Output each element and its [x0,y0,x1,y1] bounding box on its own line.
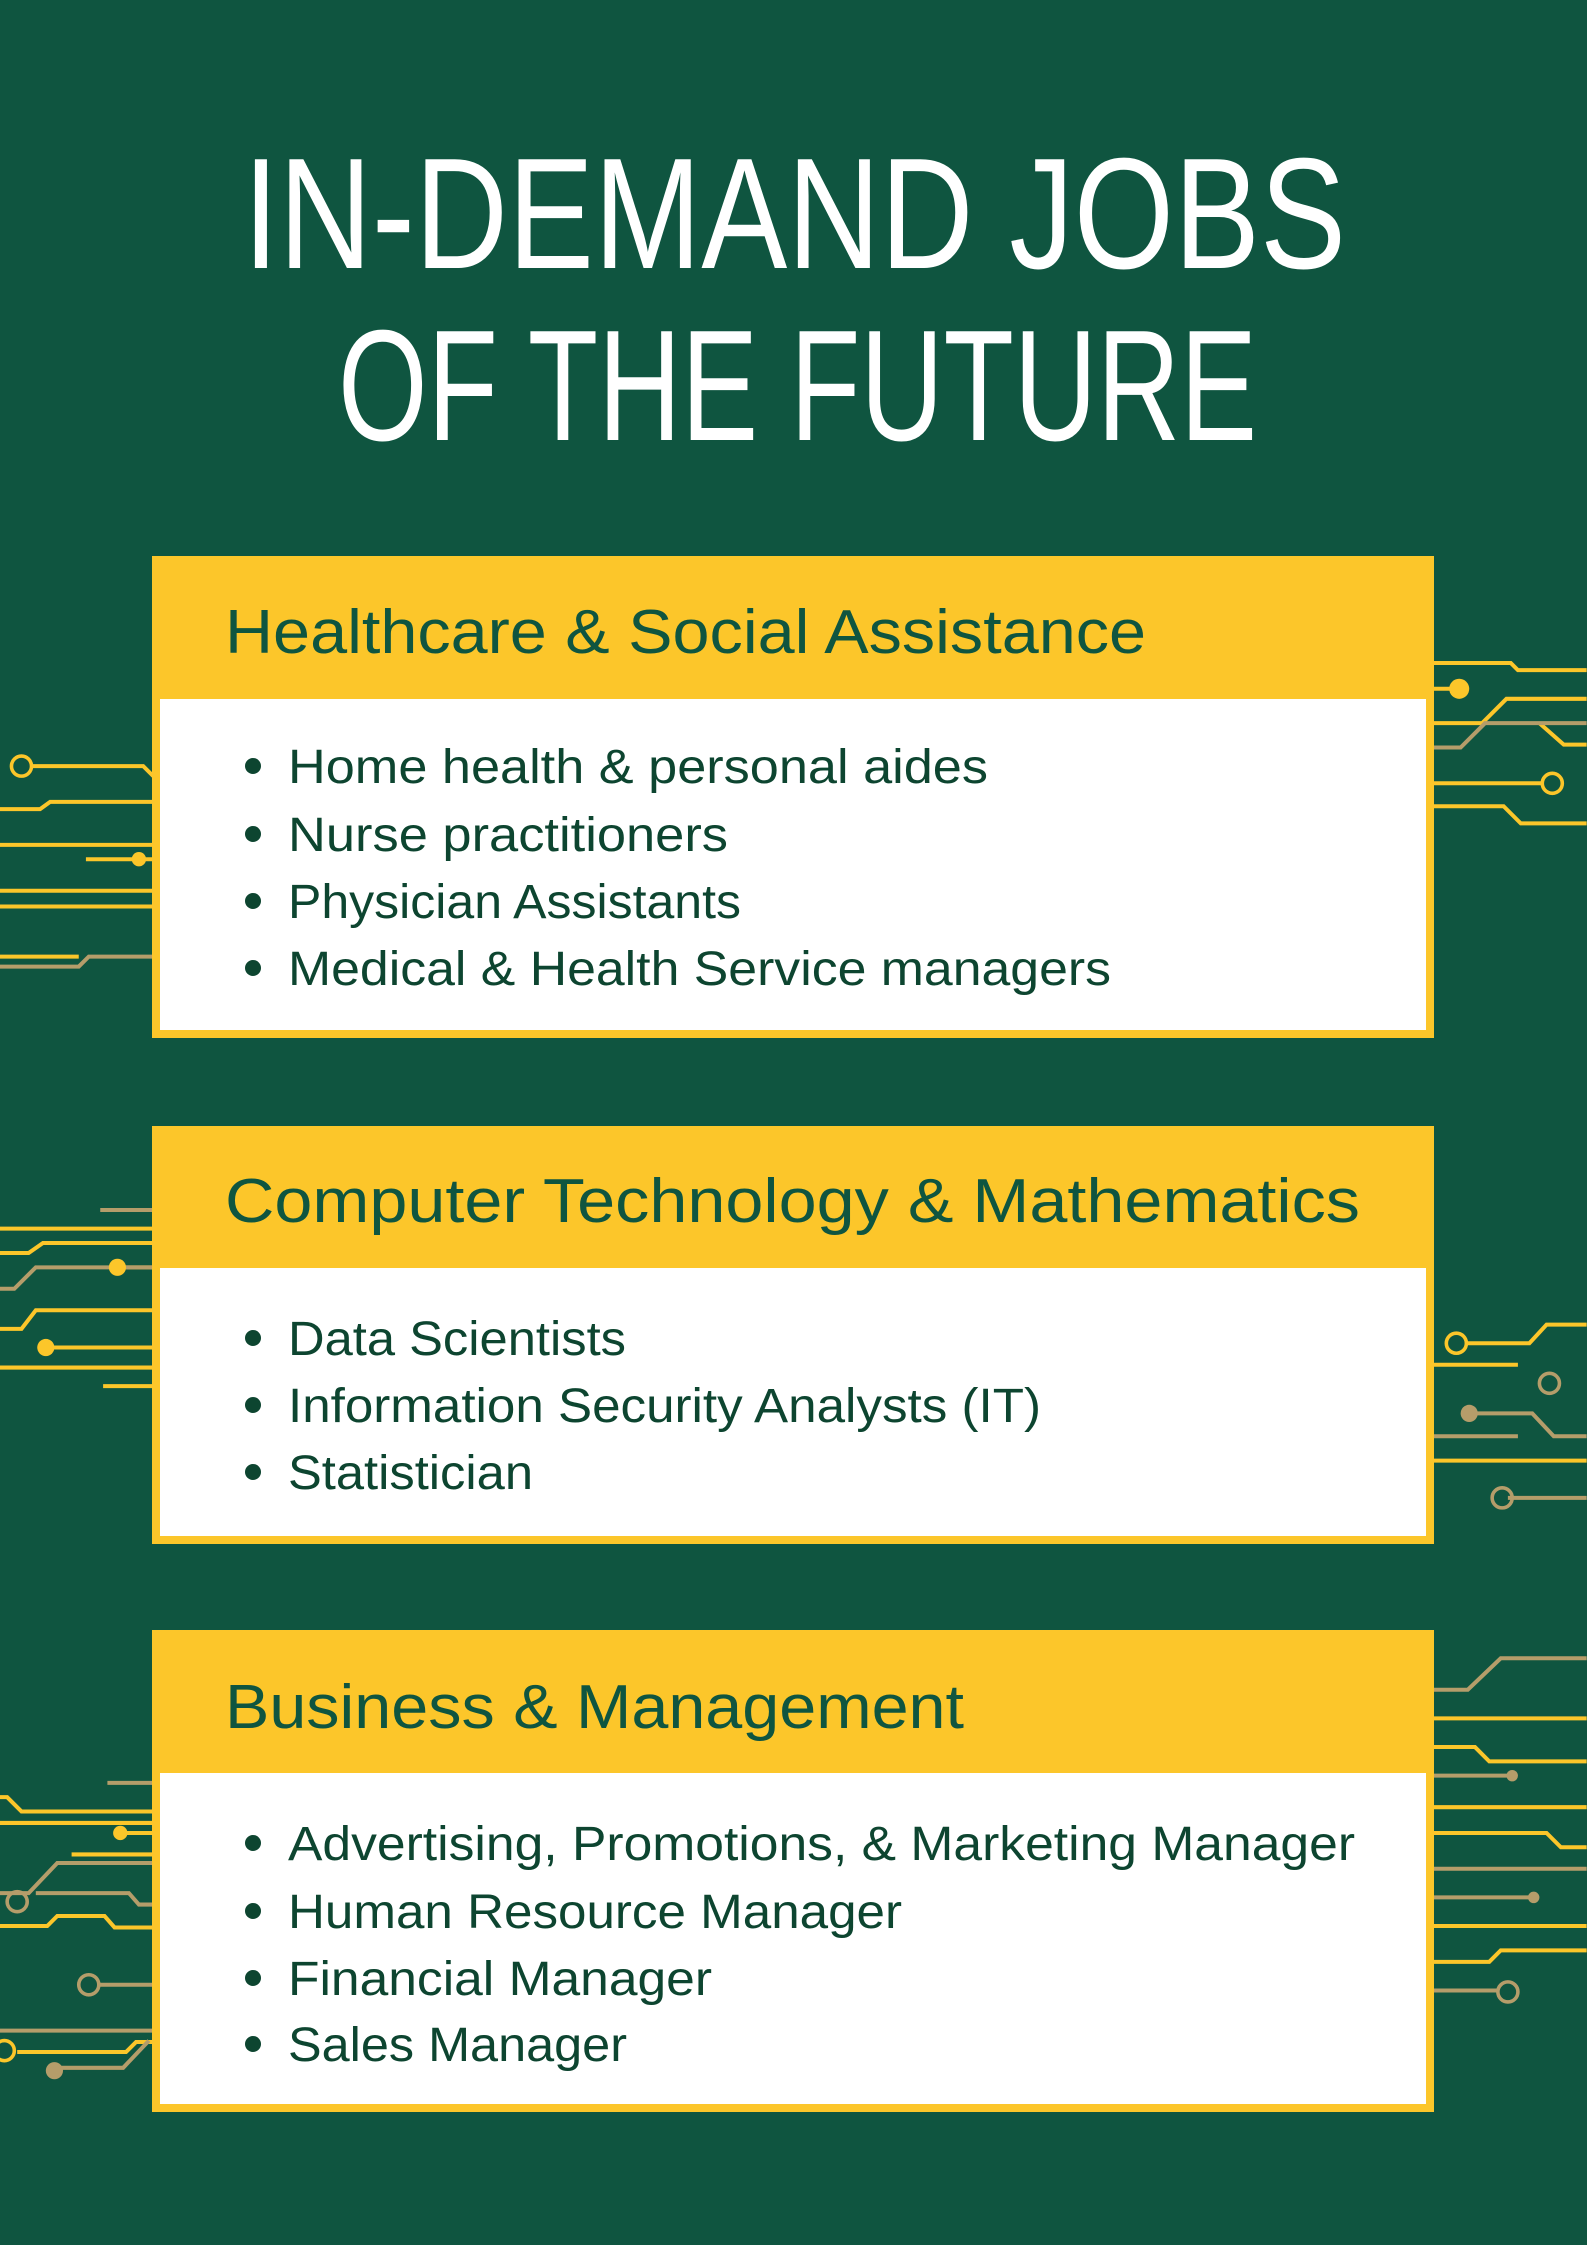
title: OF THE FUTURE [338,298,1257,474]
title [243,126,1346,474]
panel: business [152,1630,1434,2112]
list: healthcare jobs: Medical & Health Service managers [288,943,1111,996]
list: business jobs: Financial Manager [288,1953,712,2006]
list: computer jobs [245,1313,1041,1500]
panel: computer technology [152,1126,1434,1544]
list: healthcare jobs: Home health & personal aides [288,741,988,794]
list: business jobs: Human Resource Manager [288,1886,902,1939]
list: healthcare jobs: Physician Assistants [288,876,741,929]
list: business jobs: Advertising, Promotions, & Marketing Manager [288,1818,1355,1871]
list: business jobs [245,1818,1355,2072]
heading: business: Business & Management [225,1673,964,1742]
heading: healthcare: Healthcare & Social Assistance [225,598,1146,667]
panel: healthcare [152,556,1434,1038]
heading: computer technology: Computer Technology & Mathematics [225,1167,1360,1236]
title: IN-DEMAND JOBS [243,126,1346,302]
list: healthcare jobs [245,741,1111,996]
list: healthcare jobs: Nurse practitioners [288,809,728,862]
list: computer jobs: Information Security Analysts (IT) [288,1380,1041,1433]
list: computer jobs: Statistician [288,1447,533,1500]
list: computer jobs: Data Scientists [288,1313,626,1366]
circuit decorations [0,663,1587,2079]
list: business jobs: Sales Manager [288,2019,627,2072]
